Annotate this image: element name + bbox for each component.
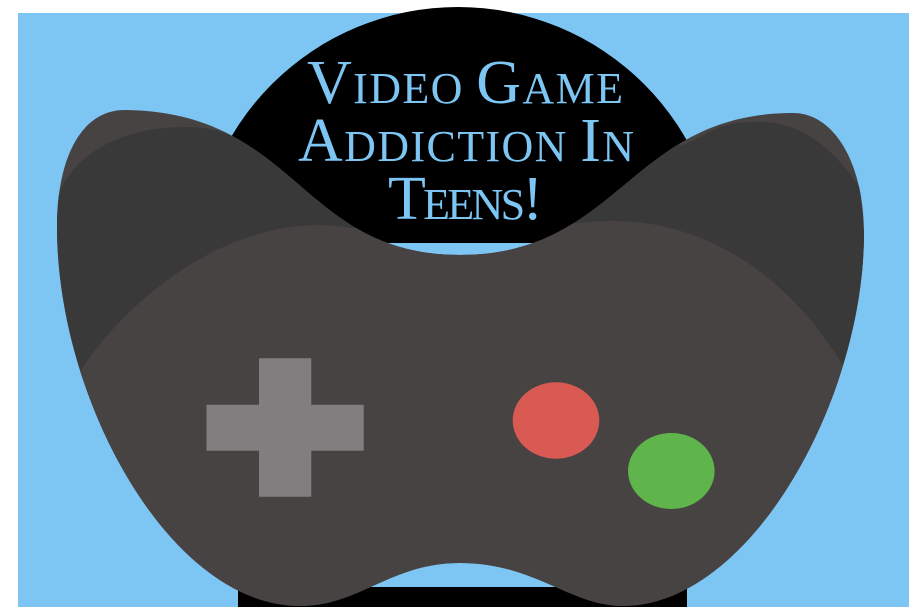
icon: red button (513, 382, 599, 459)
title: ADDICTION IN (298, 107, 634, 175)
icon: green button (628, 433, 715, 509)
title: TEENS! (388, 165, 543, 233)
title backdrop: black circle (232, 7, 686, 243)
title (298, 49, 634, 233)
controller body (50, 221, 880, 607)
controller silhouette (57, 110, 864, 606)
bottom black bar (238, 587, 687, 607)
dark shoulder shading (50, 122, 880, 400)
icon: d-pad (206, 358, 364, 497)
game controller (50, 110, 880, 607)
title: VIDEO GAME (307, 49, 623, 117)
